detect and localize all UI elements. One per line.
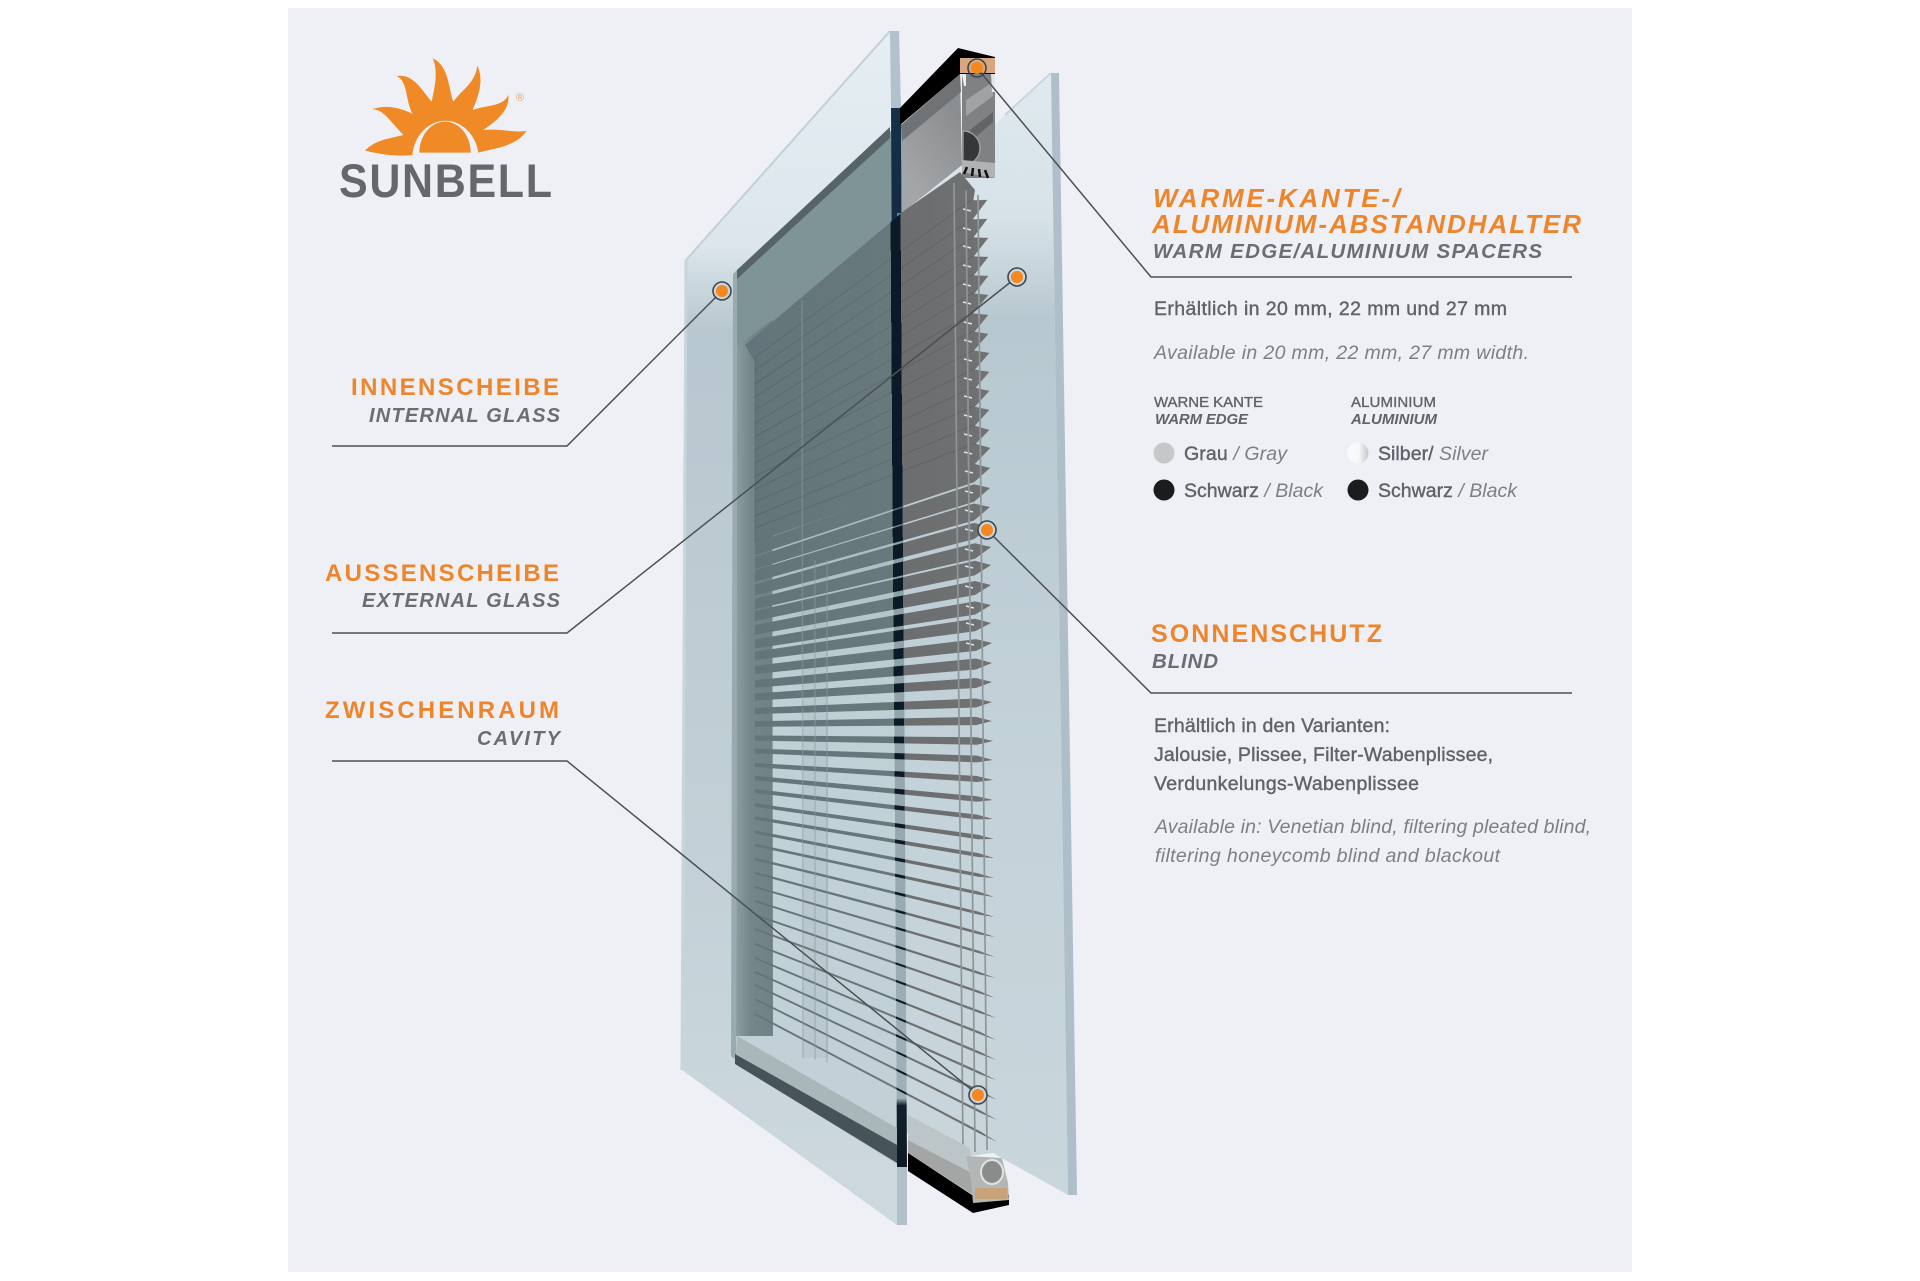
legend: warm edge colours: Schwarz / Black xyxy=(1184,480,1324,502)
legend: aluminium colours: ALUMINIUM xyxy=(1350,411,1438,428)
spacer profile top xyxy=(900,48,995,213)
wordmark: SUNBELL xyxy=(339,154,552,207)
heading: blind: SONNENSCHUTZ xyxy=(1151,620,1382,648)
internal glass pane xyxy=(682,31,907,1225)
marker: cavity xyxy=(969,1086,987,1104)
text: blind variants: Verdunkelungs-Wabenplissee xyxy=(1154,773,1419,795)
glass unit illustration xyxy=(682,31,1077,1225)
label: external glass xyxy=(325,560,561,612)
edge of pane xyxy=(891,108,907,1167)
legend: warm edge colours xyxy=(1154,394,1324,502)
blind slats, opening xyxy=(755,464,997,1142)
heading: blind: BLIND xyxy=(1152,650,1218,673)
legend: warm edge colours: Grau / Gray xyxy=(1184,443,1288,465)
registered mark: ® xyxy=(516,92,524,104)
marker: internal glass xyxy=(713,282,731,300)
legend: aluminium colours: Silber/ Silver xyxy=(1378,443,1490,465)
text: spacer sizes: Available in 20 mm, 22 mm, 27 mm width. xyxy=(1153,342,1529,364)
shaded strip behind left cords xyxy=(803,560,828,1058)
text: spacer sizes xyxy=(1153,298,1529,364)
label: internal glass: INNENSCHEIBE xyxy=(351,374,559,401)
legend: warm edge colours: WARM EDGE xyxy=(1155,411,1249,428)
icon: sun xyxy=(365,58,527,156)
leader lines xyxy=(332,68,1572,1095)
marker: spacer xyxy=(968,59,986,77)
label: external glass: EXTERNAL GLASS xyxy=(362,590,561,612)
slat ladder holes xyxy=(963,209,974,645)
label: cavity xyxy=(325,697,562,750)
label: cavity: CAVITY xyxy=(477,728,562,750)
frame of the opening xyxy=(731,127,897,1163)
marker: blind xyxy=(978,521,996,539)
opening through the pane xyxy=(735,130,897,1165)
legend: warm edge colours: WARNE KANTE xyxy=(1154,394,1263,411)
legend: aluminium colours: ALUMINIUM xyxy=(1351,394,1436,411)
text: blind variants: Jalousie, Plissee, Filter-Wabenplissee, xyxy=(1154,744,1493,766)
label: cavity: ZWISCHENRAUM xyxy=(325,697,559,724)
label: internal glass xyxy=(351,374,561,427)
logo: Sunbell xyxy=(339,58,552,207)
blind head xyxy=(745,172,975,362)
text: blind variants: Available in: Venetian blind, filtering pleated blind, xyxy=(1154,816,1591,838)
heading: spacers: ALUMINIUM-ABSTANDHALTER xyxy=(1151,209,1581,239)
heading: spacers xyxy=(1151,183,1581,263)
blind cords right xyxy=(954,183,987,1152)
text: blind variants: Erhältlich in den Varianten: xyxy=(1154,715,1390,737)
external glass pane xyxy=(900,73,1077,1195)
left reveal of blind xyxy=(736,320,773,1036)
background panel xyxy=(288,8,1632,1272)
text: blind variants xyxy=(1154,715,1591,867)
text: spacer sizes: Erhältlich in 20 mm, 22 mm und 27 mm xyxy=(1154,298,1507,320)
heading: blind xyxy=(1151,620,1382,673)
legend: aluminium colours xyxy=(1348,394,1518,502)
label: external glass: AUSSENSCHEIBE xyxy=(325,560,559,587)
heading: spacers: WARM EDGE/ALUMINIUM SPACERS xyxy=(1153,240,1542,263)
heading: spacers: WARME-KANTE-/ xyxy=(1153,183,1403,213)
text: blind variants: filtering honeycomb blind and blackout xyxy=(1155,845,1502,867)
marker: external glass xyxy=(1008,268,1026,286)
legend: aluminium colours: Schwarz / Black xyxy=(1378,480,1518,502)
label: internal glass: INTERNAL GLASS xyxy=(369,405,561,427)
blind slats, upper xyxy=(755,200,990,542)
spacer profile bottom xyxy=(908,1115,1009,1213)
blind cords left xyxy=(802,300,827,1062)
